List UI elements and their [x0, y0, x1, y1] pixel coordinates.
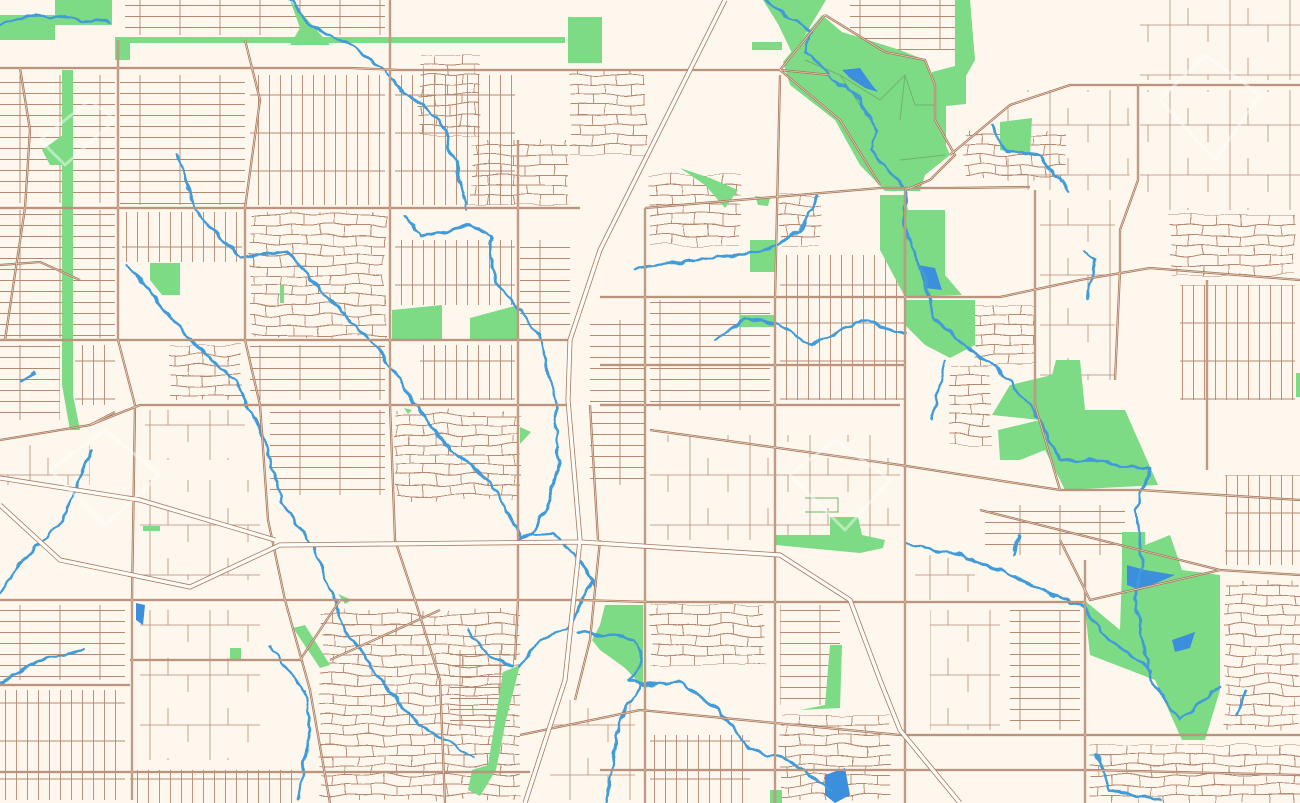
river: short creeks [932, 250, 1245, 800]
park: north nature preserve [763, 0, 826, 55]
river: top left of preserve [765, 0, 800, 22]
lake: preserve lake [842, 68, 878, 92]
park: central west pair [392, 305, 518, 340]
park: center strip [740, 315, 775, 327]
park: creek corridor [880, 195, 962, 297]
river: north west creek [290, 0, 467, 210]
park: south central park [592, 605, 643, 687]
park: west block [150, 263, 180, 295]
lake: south pond [825, 768, 850, 803]
park: creek wedge [290, 0, 330, 45]
park: south center [775, 517, 885, 553]
watermark stamp: center [790, 440, 890, 530]
park: small west [42, 130, 70, 165]
lake: southeast lakes [1127, 565, 1195, 652]
park: northeast creek [1000, 118, 1032, 155]
park: vertical greenway [62, 70, 80, 430]
trails in parks [805, 60, 945, 512]
river: top strip [0, 15, 110, 25]
lakes [136, 68, 1195, 803]
park: south east strip [800, 645, 842, 710]
park: northwest block [0, 0, 112, 40]
park: eastern park [992, 360, 1158, 490]
park: large central preserve [783, 15, 950, 191]
lake: creek lake [918, 265, 942, 290]
watermark stamp: north west [40, 100, 115, 165]
river: south west creek [128, 265, 475, 757]
park: preserve east strip [932, 0, 975, 148]
river: center creek [635, 195, 818, 268]
freeways [0, 0, 960, 803]
river: park creek [580, 632, 642, 685]
river: west creek [178, 155, 520, 535]
park: creek corridor south [905, 300, 975, 358]
park: southeast park [1084, 532, 1220, 740]
river: small south branches [22, 373, 1017, 667]
watermarks [40, 55, 1260, 530]
river: main eastern creek [800, 22, 1220, 720]
park: northern greenway [115, 37, 565, 60]
river: bottom left creek [0, 650, 85, 682]
park: center north [680, 168, 738, 208]
park: creek south [468, 665, 520, 796]
river: southeast creek [905, 545, 1150, 670]
river: south central creek [606, 682, 830, 800]
park: small triangle [520, 427, 531, 444]
river: far west creek [0, 450, 92, 592]
park: center block [750, 240, 775, 272]
watermark stamp: north east [1160, 55, 1260, 160]
lake: west pond [136, 603, 145, 625]
park: north square [568, 17, 602, 63]
watermark stamp: west [50, 430, 160, 525]
river: center east creek [715, 320, 905, 345]
river: south creek [270, 645, 310, 800]
river: northeast creek [990, 125, 1068, 190]
river: central creek [405, 215, 558, 537]
park: southwest strip [293, 625, 330, 668]
